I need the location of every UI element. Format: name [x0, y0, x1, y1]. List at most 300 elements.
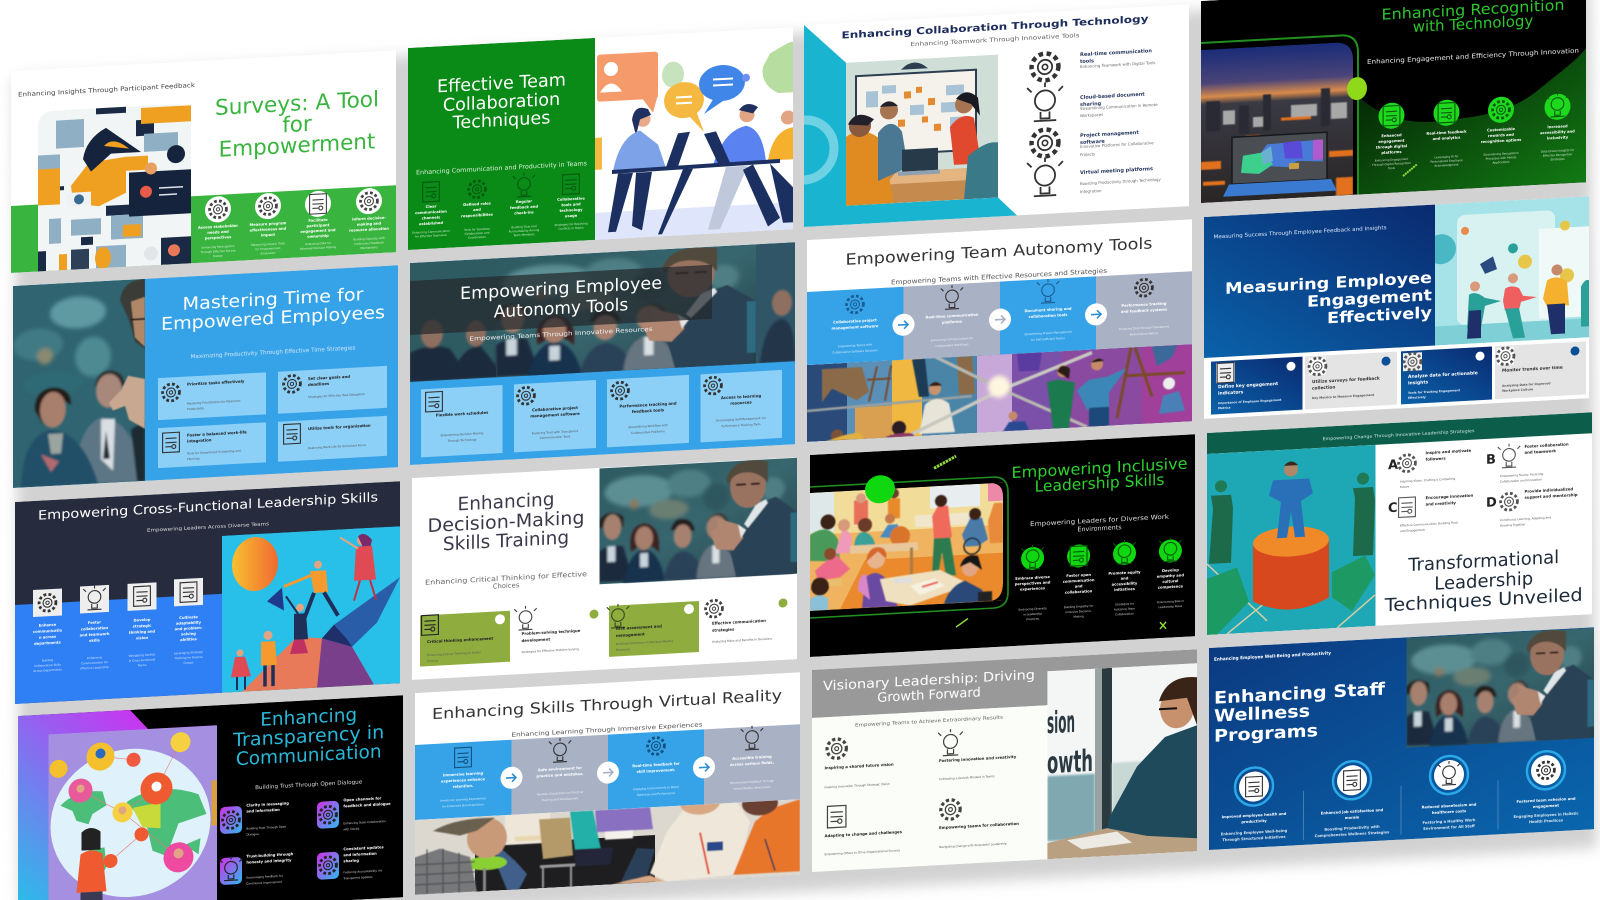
card: flexible work schedules: Empowering Decision-Making — [441, 431, 484, 437]
column: enhance communication: Enhance — [39, 623, 57, 628]
card: utilize surveys: Utilize surveys for feedback — [1312, 376, 1380, 385]
card: set clear goals: Strategies for Effective Task Delegation — [308, 392, 365, 399]
column: assess stakeholder needs: Through Effective Survey — [199, 248, 236, 254]
card: monitor trends — [1495, 341, 1586, 399]
column: enhanced engagement: platforms — [1381, 150, 1402, 155]
item D: D — [1486, 495, 1497, 511]
list item: project management software: software — [1080, 139, 1105, 146]
panel: slide Empowering Inclusive Leadership Skills — [810, 434, 1195, 657]
item B — [1486, 440, 1569, 484]
column: promote equity: accessibility — [1112, 581, 1138, 587]
panel: slide Enhancing Decision-Making Skills Training — [412, 457, 798, 680]
item: adapting to change: Empowering Others to Drive Organizational Success — [825, 848, 901, 856]
card: risk assessment: management — [616, 631, 645, 638]
column: enhanced engagement: engagement — [1378, 139, 1405, 144]
column: real-time feedback: Personalized Employee — [1430, 158, 1463, 164]
arrow: step three — [693, 756, 715, 779]
item: consistent updates — [317, 845, 384, 882]
column: collaborative project management — [832, 295, 879, 355]
subtitle: Enhancing Employee Well-Being and Productivity — [1214, 650, 1331, 663]
item: trust-building — [220, 852, 294, 887]
column: foster collaboration: and teamwork — [80, 632, 110, 638]
title: Transparency in — [232, 722, 384, 751]
column: measure program effectiveness — [250, 192, 287, 256]
title: for — [282, 112, 312, 138]
column: assess stakeholder needs: perspectives — [205, 235, 232, 241]
column: develop empathy: cultural — [1162, 579, 1178, 584]
item C: C — [1388, 501, 1398, 516]
column: immersive learning: retention. — [453, 784, 474, 789]
card: analyze data: insights — [1408, 379, 1429, 386]
column: develop strategic thinking: Teams — [137, 663, 147, 667]
item B: Collaboration and Innovation — [1500, 477, 1542, 484]
column: foster collaboration: collaboration — [81, 626, 109, 631]
card: monitor trends: Analyzing Data for Improved — [1502, 381, 1551, 388]
list item: project management software: Projects — [1080, 151, 1095, 157]
title: Empowering Inclusive — [1012, 455, 1188, 482]
column: measure program effectiveness: impact — [261, 233, 275, 238]
item: open channels: Enhancing Team Collaboration — [343, 819, 386, 825]
panel: slide Visionary Leadership: Driving Growth Forward — [812, 649, 1197, 872]
card: set clear goals: Set clear goals and — [308, 374, 350, 381]
column: real-time communication: Independent Workflows — [936, 342, 969, 348]
column: collaborative project management: Empowering Teams with — [838, 342, 872, 348]
list item: real-time communication — [1032, 48, 1155, 81]
lime accent circle — [1347, 77, 1367, 101]
column: develop empathy: empathy and — [1157, 573, 1184, 579]
list item: project management software: Innovative Platforms for Collaborative — [1080, 140, 1154, 149]
card: analyze data: Tools for Tracking Engagement — [1408, 388, 1461, 395]
item: fostering innovation: Cultivating a Growth Mindset in Teams — [939, 774, 995, 781]
photo: night city with laptop — [1201, 42, 1353, 203]
column: promote equity: and — [1121, 576, 1129, 581]
title: Empowered Employees — [161, 303, 385, 335]
item: open channels — [317, 796, 391, 833]
card: access to learning resources: Performance Tracking Tools — [721, 422, 761, 428]
column: customizable rewards: Processes with Mobile — [1486, 155, 1517, 161]
left gradient panel — [1204, 205, 1435, 358]
card: performance tracking: Streamlining Workflow with — [628, 423, 668, 429]
column: document sharing: for Self-Sufficient Teams — [1031, 336, 1065, 342]
card: utilize tools — [278, 416, 387, 462]
list item: real-time communication: tools — [1080, 58, 1094, 65]
item A: Inspiring Vision: Crafting a Compelling — [1400, 477, 1455, 484]
column: immersive learning: Immersive Learning Experiences — [440, 796, 486, 803]
column: enhanced engagement: Through Digital Recognition — [1371, 161, 1411, 167]
column: enhance communication: departments — [34, 640, 62, 646]
column: reduced absenteeism: healthcare costs — [1432, 809, 1467, 815]
column: facilitate participant engagement: Facilitate — [308, 218, 328, 223]
item B: B — [1486, 452, 1496, 468]
card: utilize surveys: collection — [1312, 384, 1335, 392]
column: immersive learning — [440, 746, 486, 809]
card: critical thinking: Critical thinking enhancement — [427, 636, 493, 644]
photo: executive at window with vision text: owth — [1047, 744, 1093, 781]
title: Effective Team — [437, 70, 566, 97]
column: foster open communication: and — [1075, 584, 1083, 589]
list item: cloud-based document sharing: Cloud-based document — [1080, 92, 1145, 101]
column: document sharing — [1024, 278, 1073, 342]
item: clarity in messaging — [220, 801, 289, 838]
column: foster collaboration — [80, 585, 110, 671]
card: effective communication: Effective communication — [712, 618, 766, 626]
column: regular feedback: Accountability Among — [509, 228, 540, 234]
photo: team and pointing leader — [1406, 628, 1594, 748]
item D: Continuous Learning: Adapting and — [1500, 515, 1551, 522]
title: Leadership Skills — [1035, 471, 1164, 496]
panel: slide Enhancing Staff Wellness Programs — [1209, 627, 1594, 850]
column: collaborative tools — [554, 173, 588, 231]
subtitle: Environments — [1077, 523, 1122, 534]
column: promote equity — [1108, 539, 1141, 617]
card: risk assessment — [607, 600, 699, 657]
title: Transformational — [1407, 547, 1559, 576]
card: critical thinking — [420, 611, 510, 667]
list item: cloud-based document sharing — [1026, 82, 1158, 122]
band backgrounds — [807, 271, 1192, 365]
item: clarity in messaging: Dialogue — [246, 832, 259, 837]
column: collaborative project management: management software — [832, 324, 879, 331]
card: monitor trends: Workplace Culture — [1502, 387, 1533, 393]
panel: slide Measuring Employee Engagement Effectively — [1204, 196, 1589, 419]
item B: Empowering Teams: Fostering — [1500, 472, 1544, 478]
card: balanced work-life: Planning — [187, 456, 200, 461]
column: job satisfaction: Comprehensive Wellness Strategies — [1315, 830, 1390, 838]
item: clarity in messaging: and information — [246, 808, 280, 814]
column: inform decision-making: Inform decision- — [352, 216, 386, 222]
list item: project management software: Project management — [1080, 130, 1139, 139]
column: inform decision-making: Mechanisms — [360, 245, 378, 250]
column: measure program effectiveness: Evaluation — [261, 251, 276, 256]
panel: slide Transformational Leadership Techniques Unveiled — [1207, 412, 1592, 635]
card: problem-solving: Problem-solving technique — [522, 628, 581, 636]
title: Enhancing Collaboration Through Technology — [842, 14, 1149, 41]
column: cultivate adaptability: Groups — [184, 660, 194, 665]
card: analyze data: Analyze data for actionable — [1408, 370, 1478, 380]
column: regular feedback: Building Trust and — [511, 224, 537, 229]
left white panel edge — [812, 705, 1047, 872]
column: real-time feedback: Leveraging AI for — [1435, 154, 1459, 159]
title: Techniques Unveiled — [1384, 585, 1583, 616]
ring decoration — [804, 116, 838, 184]
title: Enhancing — [458, 489, 554, 516]
arrow: step three — [1085, 303, 1107, 326]
column: performance tracking: Fostering Trust through Transparent — [1119, 324, 1170, 331]
column: facilitate participant engagement: ownership — [307, 234, 329, 239]
panel: slide Empowering Employee Autonomy Tools — [410, 242, 796, 465]
column: cultivate adaptability: Thinking for Diverse — [173, 655, 203, 660]
column: safe environment: Realistic Simulations for Practical — [537, 790, 583, 796]
photo: team and pointing leader — [600, 458, 797, 584]
column: enhance communication: Across Departments — [33, 667, 62, 673]
left green panel — [408, 38, 595, 250]
column: increased accessibility: Effective Recognition — [1543, 152, 1572, 158]
item C — [1388, 493, 1474, 534]
item A — [1388, 448, 1472, 490]
column: facilitate participant engagement: Informed Decision-Making — [300, 245, 336, 251]
column: defined roles: and — [473, 208, 481, 212]
item: consistent updates: sharing — [343, 859, 359, 863]
card: collaborative project management: Communication Tools — [540, 434, 571, 440]
column: accessible training — [730, 725, 775, 791]
column: document sharing: Document sharing and — [1024, 307, 1072, 313]
column: collaborative tools: Conflicts in Teams — [558, 225, 584, 231]
column: clear communication channels: established — [419, 221, 443, 226]
column: embrace diverse perspectives: perspectives and — [1015, 581, 1051, 586]
column: clear communication channels: Enhancing Communication — [412, 229, 450, 235]
column: facilitate participant engagement — [300, 190, 336, 251]
list item: cloud-based document sharing: Streamlining Communication in Remote — [1080, 102, 1158, 111]
subtitle: Enhancing Engagement and Efficiency Through Innovation — [1367, 47, 1579, 66]
card: risk assessment: Risk assessment and — [616, 623, 662, 631]
column: real-time feedback — [1426, 99, 1467, 168]
column: improved health: Through Structured Initiatives — [1222, 835, 1286, 842]
item: empowering teams: Empowering teams for collaboration — [939, 821, 1019, 830]
column: customizable rewards: Customizable — [1487, 127, 1515, 133]
item D: Growing Together — [1500, 522, 1526, 528]
item C: Effective Communication: Building Trust — [1400, 520, 1459, 528]
subtitle: Empowering Change Through Innovative Leadership Strategies — [1322, 428, 1475, 441]
illustration: inclusive classroom — [810, 482, 1003, 611]
column: document sharing: Streamlining Project Management — [1024, 330, 1073, 336]
card: effective communication: Analyzing Risks and Benefits in Decisions — [712, 637, 772, 644]
column: accessible training: Personalized Feedback Through — [730, 779, 774, 785]
green accent circle — [865, 474, 895, 504]
image frame outline — [1201, 35, 1358, 203]
column: clear communication channels: for Effective Teamwork — [415, 233, 447, 239]
item: fostering innovation — [938, 726, 1017, 781]
subtitle: Measuring Success Through Employee Feedback and Insights — [1214, 225, 1387, 240]
column: foster open communication: Foster open — [1066, 573, 1091, 578]
column: defined roles: Coordination — [468, 235, 486, 240]
arrow: step one — [500, 766, 522, 789]
card: define key engagement indicators: Define key engagement — [1218, 381, 1279, 390]
blue lower band — [15, 594, 222, 704]
card: effective communication: strategies — [712, 627, 735, 633]
panel: slide Mastering Time for Empowered Employees — [13, 265, 398, 488]
column: job satisfaction — [1315, 759, 1390, 838]
column: inform decision-making: resource allocation — [349, 227, 389, 233]
item: open channels: with Clarity — [343, 827, 360, 831]
item: inspiring a shared vision — [824, 736, 894, 789]
column: regular feedback: check-ins — [514, 210, 535, 215]
subtitle: Empowering Leaders for Diverse Work — [1030, 513, 1169, 528]
column: immersive learning: experiences enhance — [441, 777, 485, 784]
column: performance tracking: Performance Metrics — [1130, 331, 1159, 337]
subtitle: Choices — [493, 581, 520, 591]
title: Enhancing Skills Through Virtual Reality — [432, 686, 782, 723]
card: utilize surveys — [1305, 352, 1397, 410]
column: customizable rewards: Streamlining Recognition — [1483, 151, 1519, 157]
column: customizable rewards: Applications — [1492, 160, 1510, 165]
column: real-time feedback: skill improvement. — [637, 768, 676, 774]
panel: slide Surveys: A Tool for Empowerment — [11, 50, 396, 274]
list item: real-time communication: Real-time communication — [1080, 48, 1152, 58]
image frame outline — [810, 476, 1008, 618]
card: performance tracking: Collaborative Platforms — [631, 429, 665, 435]
illustration: leader figure on pedestal — [1207, 445, 1376, 635]
column: defined roles — [461, 180, 494, 240]
column: cultivate adaptability: and problem- — [175, 626, 203, 631]
gradient wedge — [18, 705, 217, 900]
column: regular feedback — [509, 172, 540, 238]
column: develop strategic thinking: strategic — [133, 624, 151, 629]
column: develop empathy: competence — [1158, 584, 1184, 590]
column: immersive learning: for Enhanced Skill Acquisition — [442, 802, 484, 809]
column: cultivate adaptability — [173, 578, 203, 665]
column: regular feedback: Team Members — [512, 232, 535, 237]
column: safe environment: practice and mistakes. — [536, 772, 584, 778]
column: facilitate participant engagement: participant — [307, 223, 330, 228]
column: embrace diverse perspectives — [1015, 544, 1051, 622]
title: Engagement — [1307, 286, 1433, 311]
column: enhance communication: Collaborative Skills — [34, 663, 61, 668]
card: define key engagement indicators: Importance of Employee Engagement — [1218, 398, 1282, 405]
column: promote equity: Strategies for — [1115, 601, 1135, 607]
title: Techniques — [452, 108, 550, 134]
column: cultivate adaptability: abilities — [180, 637, 198, 642]
title: Empowering Team Autonomy Tools — [846, 234, 1153, 269]
column: real-time feedback: and analytics — [1433, 136, 1461, 141]
card: prioritize tasks: Productivity — [187, 406, 204, 411]
column: job satisfaction: Boosting Productivity with — [1324, 825, 1380, 832]
column: reduced absenteeism — [1422, 755, 1477, 831]
lime squiggles — [934, 445, 1166, 641]
subtitle: Empowering Teams Through Innovative Resources — [469, 326, 652, 343]
column: promote equity: Collaboration — [1115, 612, 1134, 617]
column: real-time feedback: Engaging Environments to Boost — [633, 785, 680, 791]
column: clear communication channels — [412, 181, 450, 239]
column: collaborative tools: usage — [565, 214, 578, 218]
arrow: step two — [989, 308, 1011, 331]
column: collaborative project management: Collaborative Software Solutions — [832, 348, 878, 355]
top band — [1207, 412, 1592, 454]
item D: support and mentorship — [1525, 492, 1578, 500]
photo: executive at window with vision text: sion — [1047, 705, 1075, 741]
arrow: step one — [892, 313, 914, 336]
item: fostering innovation: Fostering innovation and creativity — [939, 754, 1017, 763]
column: customizable rewards — [1481, 96, 1522, 165]
column: defined roles: Defined roles — [463, 201, 492, 207]
item D — [1486, 486, 1578, 528]
column: develop strategic thinking: Develop — [134, 618, 151, 623]
photo: workshop participants — [415, 799, 800, 895]
column: foster open communication: collaboration — [1065, 589, 1093, 595]
card: critical thinking: Choices — [427, 659, 439, 663]
title: Mastering Time for — [183, 285, 364, 315]
column: accessible training: Accessible training — [732, 755, 772, 761]
column: enhance communication: n across — [39, 635, 57, 640]
title: with Technology — [1413, 12, 1533, 36]
list item: real-time communication: Enhancing Teamwork with Digital Tools — [1080, 60, 1155, 69]
item: trust-building: Continuous Improvement — [246, 880, 283, 886]
title: Visionary Leadership: Driving — [823, 668, 1035, 694]
column: promote equity: Fostering Team — [1114, 606, 1135, 612]
card: balanced work-life: integration — [187, 437, 212, 444]
title: Leadership — [1434, 568, 1533, 595]
illustration: team at whiteboard — [846, 54, 998, 206]
column: collaborative tools: Strategies for Resolving — [554, 221, 588, 227]
column: reduced absenteeism: Fostering a Healthy Work — [1423, 818, 1476, 825]
column: real-time feedback: Acknowledgment — [1434, 162, 1459, 168]
card: set clear goals: deadlines — [308, 381, 330, 387]
column: performance tracking — [1119, 278, 1170, 337]
column: real-time communication: Enhancing Communication for — [931, 336, 974, 342]
list item: cloud-based document sharing: Workspaces — [1080, 112, 1103, 118]
column: clear communication channels: communication — [415, 209, 447, 215]
column: real-time communication: Real-time communication — [925, 313, 979, 320]
subtitle: Empowering Leaders Across Diverse Teams — [147, 521, 270, 534]
column: facilitate participant engagement: Analyzing Data for — [305, 241, 332, 246]
title: Autonomy Tools — [494, 295, 628, 322]
item C: and creativity — [1426, 500, 1456, 507]
column: accessible training: across various fields. — [730, 761, 775, 767]
column: real-time feedback: Retention and Performance — [637, 791, 675, 797]
subtitle: Building Trust Through Open Dialogue — [255, 779, 363, 791]
column: customizable rewards: recognition options — [1481, 138, 1522, 144]
column: embrace diverse perspectives: in Leadership — [1023, 611, 1042, 616]
column: develop strategic thinking: Navigating Conflict — [129, 652, 156, 658]
column: promote equity: initiatives — [1114, 587, 1136, 592]
column: real-time feedback: Real-time feedback for — [632, 762, 680, 768]
column: improved health: Improved employee health and — [1222, 812, 1287, 819]
card: define key engagement indicators: indicators — [1218, 389, 1244, 397]
card: utilize tools: Balancing Work-Life for Enhanced Focus — [308, 443, 366, 450]
list item: virtual meeting platforms: Virtual meeting platforms — [1080, 166, 1153, 176]
title: Enhancing Staff — [1214, 679, 1385, 709]
card: collaborative project management: management software — [530, 411, 580, 419]
column: regular feedback: feedback and — [510, 205, 538, 210]
column: embrace diverse perspectives: Practices — [1026, 617, 1039, 621]
card: prioritize tasks: Prioritize tasks effectively — [187, 378, 245, 387]
column: regular feedback: Regular — [516, 199, 532, 204]
column: increased accessibility: Increased — [1547, 124, 1568, 129]
column: immersive learning: Immersive learning — [443, 771, 483, 777]
column: enhanced engagement — [1371, 102, 1411, 171]
item: adapting to change — [824, 802, 903, 856]
column: cultivate adaptability: Leveraging Strategic — [174, 650, 203, 655]
card: risk assessment: Processes — [616, 647, 631, 652]
column: measure program effectiveness: Measuring Impact: Tools — [251, 241, 285, 247]
card: balanced work-life: Tools for Streamlined Scheduling and — [186, 449, 241, 456]
column: foster open communication — [1063, 544, 1095, 619]
panel: slide Enhancing Skills Through Virtual Reality — [413, 672, 800, 895]
card: balanced work-life: Foster a balanced work-life — [187, 429, 247, 438]
item: consistent updates: Fostering Accountability via — [343, 868, 382, 874]
column: enhance communication: communicatio — [33, 628, 63, 634]
card: performance tracking: Performance tracking and — [619, 401, 677, 409]
column: cultivate adaptability: Cultivate — [179, 615, 198, 620]
item: consistent updates: Transparent Updates — [342, 875, 373, 880]
card: problem-solving: development — [522, 637, 550, 643]
column: performance tracking: Performance tracking — [1121, 302, 1167, 308]
column: team cohesion: engagement — [1533, 804, 1559, 809]
item A: A — [1388, 458, 1398, 473]
column: embrace diverse perspectives: experiences — [1020, 586, 1046, 592]
card: effective communication — [706, 596, 788, 644]
panel: slide Effective Team Collaboration Techniques — [408, 27, 795, 250]
column: embrace diverse perspectives: Embracing Diversity — [1018, 606, 1047, 612]
photo: team and pointing leader — [410, 242, 795, 382]
item B: Foster collaboration — [1525, 441, 1569, 449]
column: collaborative tools: tools and — [561, 202, 581, 207]
column: enhanced engagement: through digital — [1376, 144, 1407, 150]
column: foster collaboration: skills — [89, 638, 101, 643]
card: define key engagement indicators: Metrics — [1218, 406, 1231, 410]
column: inform decision-making — [349, 187, 389, 251]
item: empowering teams — [939, 796, 1019, 849]
item: trust-building: Trust-building through — [246, 852, 294, 859]
